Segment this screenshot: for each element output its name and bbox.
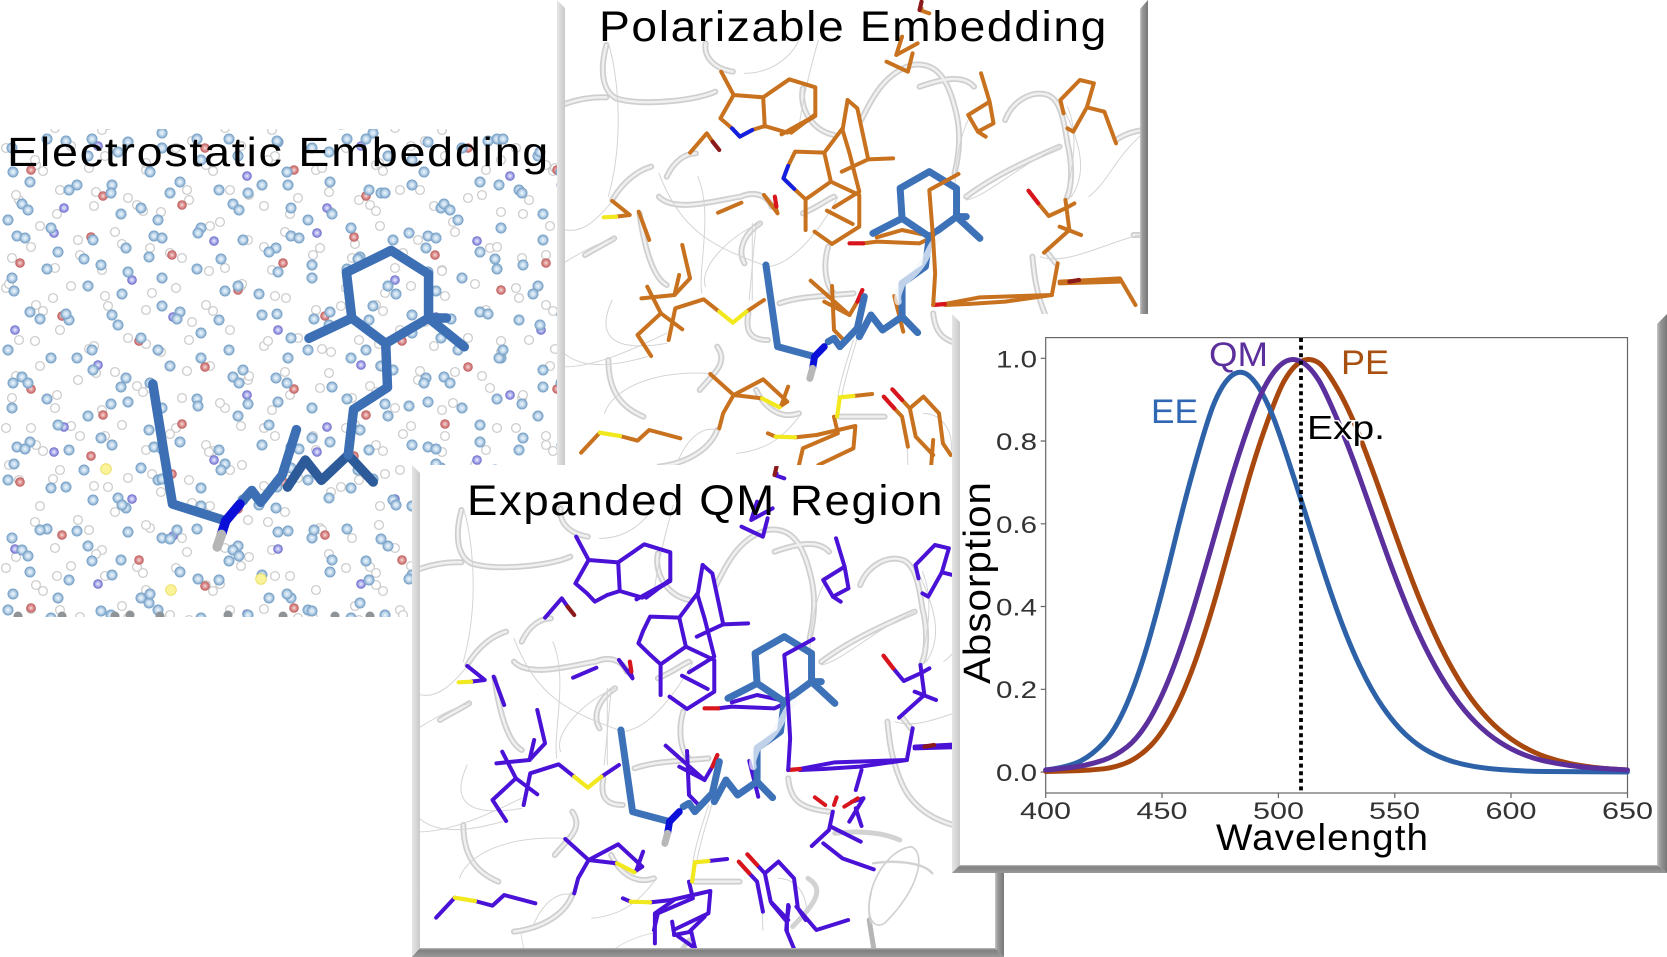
title: electrostatic embedding: Electrostatic Embedding bbox=[7, 129, 550, 175]
title: polarizable embedding: Polarizable Embedding bbox=[599, 3, 1108, 51]
y axis tick labels: 0.0 bbox=[996, 760, 1037, 787]
panel: polarizable embedding bbox=[557, 0, 1148, 470]
curve: EE bbox=[1046, 372, 1627, 772]
x axis tick labels: 450 bbox=[1136, 798, 1188, 825]
curve label: experimental: Exp. bbox=[1307, 409, 1385, 446]
panel: absorption spectra chart bbox=[952, 314, 1667, 873]
y axis tick labels bbox=[996, 346, 1037, 787]
title: expanded QM region: Expanded QM Region bbox=[467, 477, 944, 525]
x axis tick labels: 650 bbox=[1602, 798, 1653, 825]
x axis tick labels: 600 bbox=[1486, 798, 1536, 825]
axis title: absorption: Absorption bbox=[957, 481, 999, 684]
y axis tick labels: 0.4 bbox=[996, 594, 1037, 622]
curve label: EE: EE bbox=[1151, 393, 1198, 431]
plot frame and ticks bbox=[1041, 338, 1628, 798]
y axis tick labels: 1.0 bbox=[996, 346, 1037, 374]
panel: expanded QM region bbox=[412, 465, 1004, 957]
curve: PE bbox=[1046, 359, 1627, 772]
curve: QM bbox=[1046, 360, 1627, 770]
y axis tick labels: 0.8 bbox=[996, 429, 1037, 456]
x axis tick labels: 400 bbox=[1020, 798, 1071, 825]
x axis tick labels: 550 bbox=[1369, 798, 1420, 825]
panel: electrostatic embedding bbox=[0, 129, 560, 620]
experimental reference line bbox=[1299, 338, 1303, 793]
water and point-charge field bbox=[0, 129, 560, 620]
retinal molecule bbox=[153, 250, 464, 547]
curve label: QM: QM bbox=[1209, 336, 1268, 374]
x axis tick labels bbox=[1020, 798, 1653, 825]
x axis tick labels: 500 bbox=[1253, 798, 1304, 825]
curve label: PE: PE bbox=[1341, 344, 1389, 382]
y axis tick labels: 0.6 bbox=[996, 512, 1037, 539]
y axis tick labels: 0.2 bbox=[996, 677, 1037, 704]
axis title: wavelength: Wavelength bbox=[1216, 817, 1429, 858]
